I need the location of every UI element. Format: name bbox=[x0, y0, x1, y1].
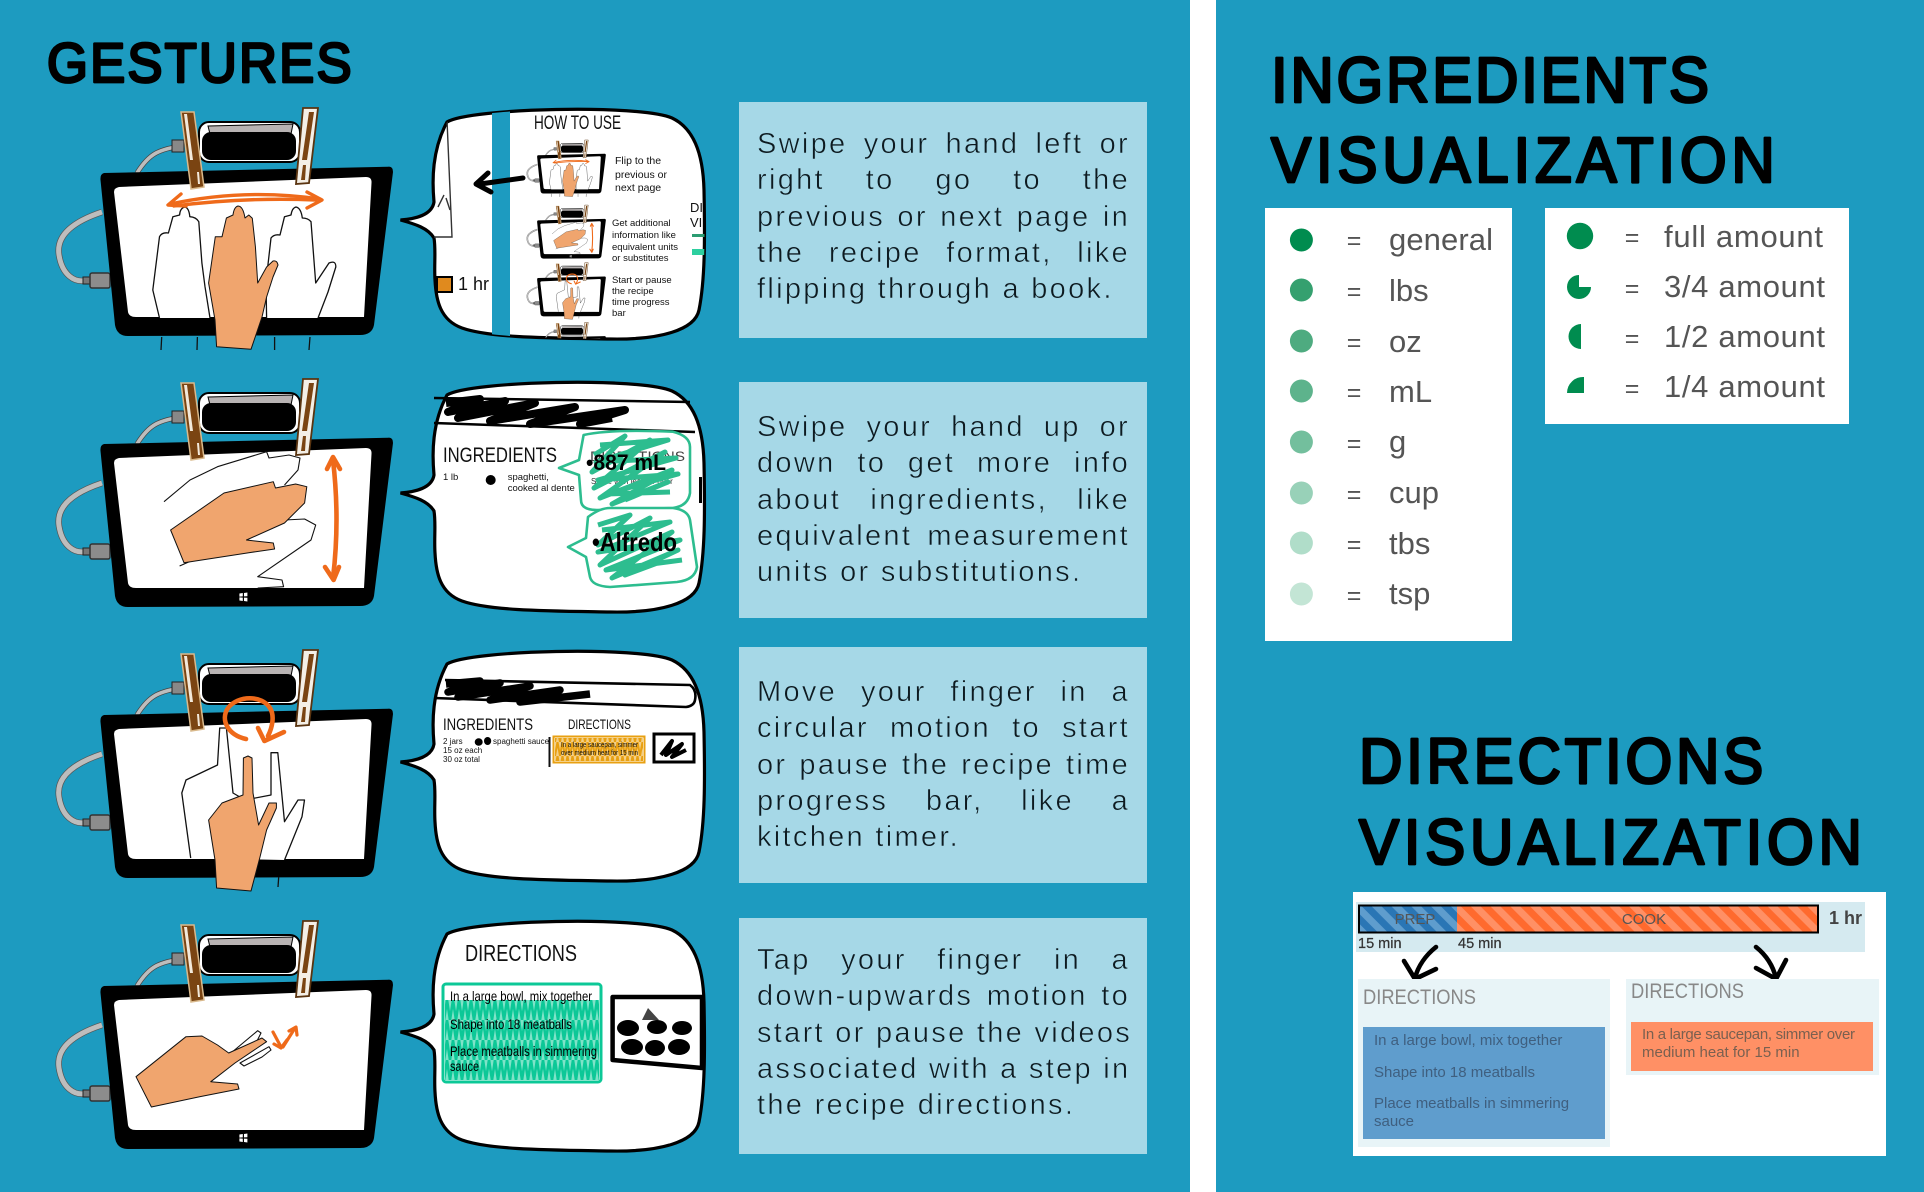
cook directions card bbox=[1626, 979, 1879, 1075]
mini captions: the recipe bbox=[612, 286, 654, 297]
orange direction box bbox=[554, 736, 644, 762]
icon: orange hand bbox=[171, 482, 307, 563]
directions visualization panel bbox=[1353, 892, 1886, 1156]
title: ingredients visualization bbox=[1271, 45, 1775, 196]
legend labels: tsp bbox=[1389, 576, 1430, 611]
mini captions: next page bbox=[615, 182, 661, 194]
text panel: swipe up or down: down to get more info bbox=[757, 447, 1130, 479]
right background panel bbox=[1216, 0, 1924, 1192]
mini captions bbox=[612, 155, 703, 319]
icon: video thumbnail of meatballs bbox=[613, 997, 702, 1068]
text panel: tap motion: start or pause the videos bbox=[757, 1017, 1132, 1049]
amount labels: = bbox=[1625, 275, 1639, 303]
amount labels: = bbox=[1625, 325, 1639, 353]
mini captions: or substitutes bbox=[612, 253, 669, 264]
legend labels: = bbox=[1347, 582, 1361, 610]
icon: windows logo bbox=[239, 1134, 247, 1142]
mini captions: previous or bbox=[615, 169, 667, 181]
text panel: tap motion: down-upwards motion to bbox=[757, 980, 1130, 1012]
mini captions: Start or pause bbox=[612, 275, 672, 286]
icon: ghost fingers bbox=[231, 1031, 271, 1066]
text panel: tap motion: associated with a step in bbox=[757, 1053, 1130, 1085]
arrow: horizontal swipe bbox=[168, 192, 322, 208]
speech bubble: ingredient substitutions bbox=[400, 382, 704, 612]
title: directions visualization: VISUALIZATION bbox=[1359, 807, 1862, 878]
mini captions: information like bbox=[612, 230, 676, 241]
progress bar outline bbox=[1359, 906, 1818, 932]
header band bbox=[434, 398, 695, 432]
callout: 887 mL: •887 mL bbox=[586, 450, 666, 475]
icon: orange time chip bbox=[437, 277, 452, 292]
cook directions card: DIRECTIONS bbox=[1631, 980, 1744, 1003]
icon: half amount bbox=[1568, 324, 1581, 349]
heading: directions: DIRECTIONS bbox=[568, 716, 631, 732]
ingredient lines: 2 jars bbox=[443, 737, 463, 746]
icon: orange hand bbox=[209, 206, 278, 349]
text panel: circular motion: progress bar, like a bbox=[757, 785, 1130, 817]
green direction box: Place meatballs in simmering bbox=[450, 1043, 597, 1059]
illustration: tablet swipe left or right bbox=[59, 108, 393, 350]
text panel: swipe up or down: Swipe your hand up or bbox=[757, 411, 1130, 443]
arrow: prep to directions bbox=[1404, 947, 1436, 979]
ingredient lines: spaghetti sauce bbox=[493, 737, 550, 746]
text panel: circular motion: kitchen timer. bbox=[757, 821, 960, 853]
amount labels: = bbox=[1625, 375, 1639, 403]
mini captions: Get additional bbox=[612, 218, 671, 229]
text panel: tap motion: Tap your finger in a bbox=[757, 944, 1130, 976]
text panel: swipe up or down: units or substitutions. bbox=[757, 556, 1082, 588]
bar labels: 45 min bbox=[1458, 936, 1502, 952]
ingredient lines bbox=[443, 737, 550, 767]
heading: how to use: HOW TO USE bbox=[534, 113, 621, 134]
mini captions: Flip to the bbox=[615, 155, 661, 167]
bar labels: 15 min bbox=[1358, 936, 1402, 952]
legend labels: = bbox=[1347, 481, 1361, 509]
prep directions card: In a large bowl, mix together bbox=[1374, 1032, 1562, 1049]
arrow: cook to directions bbox=[1756, 947, 1786, 979]
legend labels: = bbox=[1347, 278, 1361, 306]
text panel: circular motion: Move your finger in a bbox=[757, 676, 1130, 708]
icon: quarter amount bbox=[1567, 377, 1584, 393]
icon: windows logo bbox=[239, 592, 247, 602]
title: ingredients visualization: INGREDIENTS bbox=[1271, 45, 1709, 116]
amount labels: 3/4 amount bbox=[1664, 269, 1825, 304]
mini captions: bar bbox=[612, 308, 626, 319]
mini captions: time progress bbox=[612, 297, 670, 308]
orange direction box: over medium heat for 15 min bbox=[561, 748, 638, 757]
prep directions card: sauce bbox=[1374, 1113, 1414, 1130]
icon: video thumbnail bbox=[654, 734, 694, 762]
text panel: swipe up or down bbox=[739, 382, 1147, 618]
text panel: swipe left or right bbox=[739, 102, 1147, 338]
speech bubble: timer progress bbox=[400, 651, 704, 881]
ingredient lines: 15 oz each bbox=[443, 746, 482, 755]
arrow: to the previous page bbox=[476, 173, 523, 192]
arrow: vertical swipe bbox=[325, 457, 340, 580]
callout: 887 mL bbox=[559, 431, 690, 510]
text panel: swipe left or right: flipping through a book. bbox=[757, 273, 1114, 305]
icon: ghost hand bbox=[182, 728, 304, 887]
text panel: swipe left or right: Swipe your hand left or bbox=[757, 128, 1130, 160]
title: directions visualization bbox=[1359, 726, 1862, 878]
green direction box bbox=[443, 984, 601, 1082]
legend labels: = bbox=[1347, 379, 1361, 407]
bar labels bbox=[1358, 908, 1862, 952]
prep directions card: Place meatballs in simmering bbox=[1374, 1095, 1569, 1112]
legend dots bbox=[1290, 228, 1313, 606]
progress band bbox=[1356, 902, 1865, 952]
green direction box: Shape into 18 meatballs bbox=[450, 1016, 572, 1032]
bar labels: PREP bbox=[1395, 911, 1435, 928]
text panel: circular motion: or pause the recipe time bbox=[757, 749, 1130, 781]
callout: Alfredo: •Alfredo bbox=[592, 527, 677, 557]
bar labels: COOK bbox=[1622, 911, 1666, 928]
text panel: tap motion bbox=[739, 918, 1147, 1154]
text panel: circular motion bbox=[739, 647, 1147, 883]
header band bbox=[434, 680, 695, 707]
callout: Alfredo bbox=[568, 508, 697, 587]
legend labels: = bbox=[1347, 227, 1361, 255]
legend labels: tbs bbox=[1389, 526, 1430, 561]
icon: ghost hands bbox=[164, 452, 316, 588]
legend: amounts bbox=[1545, 208, 1849, 424]
text panel: swipe left or right: previous or next page in bbox=[757, 201, 1130, 233]
speech bubble: how to use page bbox=[400, 108, 706, 341]
legend labels: lbs bbox=[1389, 273, 1429, 308]
text panel: swipe left or right: the recipe format, like bbox=[757, 237, 1130, 269]
icon: orange hand bbox=[136, 1036, 267, 1107]
prep directions card: DIRECTIONS bbox=[1363, 986, 1476, 1009]
cook directions card: medium heat for 15 min bbox=[1642, 1044, 1800, 1061]
icon: three quarter amount bbox=[1567, 275, 1591, 299]
legend: measurement units bbox=[1265, 208, 1512, 641]
mini captions: VI bbox=[690, 215, 702, 230]
prep directions card bbox=[1358, 979, 1610, 1147]
legend labels: cup bbox=[1389, 475, 1439, 510]
text panel: circular motion: circular motion to start bbox=[757, 712, 1130, 744]
legend labels: = bbox=[1347, 531, 1361, 559]
left background panel bbox=[0, 0, 1190, 1192]
amount labels: 1/2 amount bbox=[1664, 319, 1825, 354]
ingredient row: cooked al dente bbox=[508, 483, 575, 494]
green direction box: In a large bowl, mix together bbox=[450, 988, 592, 1004]
arrow: down and up tap bbox=[273, 1027, 297, 1048]
cook directions card: In a large saucepan, simmer over bbox=[1642, 1026, 1855, 1043]
bar labels: 1 hr bbox=[1829, 908, 1862, 928]
legend labels: = bbox=[1347, 329, 1361, 357]
callout: 887 mL: DIRECTIONS bbox=[590, 448, 685, 464]
ingredient row: 1 lb bbox=[443, 472, 458, 483]
mini captions: DI bbox=[690, 200, 703, 215]
legend labels: mL bbox=[1389, 374, 1432, 409]
text panel: swipe up or down: about ingredients, like bbox=[757, 484, 1130, 516]
heading: ingredients: INGREDIENTS bbox=[443, 444, 557, 467]
ingredient lines: 30 oz total bbox=[443, 755, 480, 764]
legend labels bbox=[1347, 222, 1493, 611]
title: ingredients visualization: VISUALIZATION bbox=[1271, 125, 1775, 196]
arrow: circular motion bbox=[225, 698, 284, 741]
prep directions card: Shape into 18 meatballs bbox=[1374, 1064, 1535, 1081]
legend labels: g bbox=[1389, 424, 1406, 459]
amount labels: 1/4 amount bbox=[1664, 369, 1825, 404]
text: 1 hr: 1 hr bbox=[458, 274, 489, 294]
title: directions visualization: DIRECTIONS bbox=[1359, 726, 1763, 797]
orange direction box: In a large saucepan, simmer bbox=[561, 740, 638, 749]
amount labels: = bbox=[1625, 224, 1639, 252]
green direction box: sauce bbox=[450, 1058, 479, 1074]
legend labels: oz bbox=[1389, 324, 1422, 359]
progress bar: prep bbox=[1359, 906, 1457, 932]
heading: ingredients: INGREDIENTS bbox=[443, 715, 533, 734]
ingredient row bbox=[443, 466, 702, 503]
amount labels bbox=[1625, 219, 1825, 404]
title: gestures: GESTURES bbox=[47, 32, 352, 94]
text panel: tap motion: the recipe directions. bbox=[757, 1089, 1075, 1121]
illustration: tablet tap motion bbox=[59, 921, 393, 1149]
heading: directions: DIRECTIONS bbox=[465, 940, 577, 966]
progress bar: cook bbox=[1457, 906, 1818, 932]
mini captions: equivalent units bbox=[612, 242, 678, 253]
text panel: swipe up or down: equivalent measurement bbox=[757, 520, 1130, 552]
icon: ghost hands bbox=[153, 207, 336, 350]
icon: full amount bbox=[1567, 223, 1593, 249]
icon: orange hand bbox=[209, 756, 276, 891]
legend labels: general bbox=[1389, 222, 1493, 257]
mini tablets bbox=[526, 140, 606, 339]
callout: 887 mL: Serve with leather over bbox=[591, 477, 673, 486]
illustration: tablet swipe up or down bbox=[59, 379, 393, 607]
speech bubble: directions with video bbox=[400, 921, 704, 1151]
text panel: swipe left or right: right to go to the bbox=[757, 164, 1130, 196]
legend labels: = bbox=[1347, 430, 1361, 458]
ingredient row: spaghetti, bbox=[508, 472, 549, 483]
amount labels: full amount bbox=[1664, 219, 1823, 254]
illustration: tablet circular motion bbox=[59, 650, 393, 891]
